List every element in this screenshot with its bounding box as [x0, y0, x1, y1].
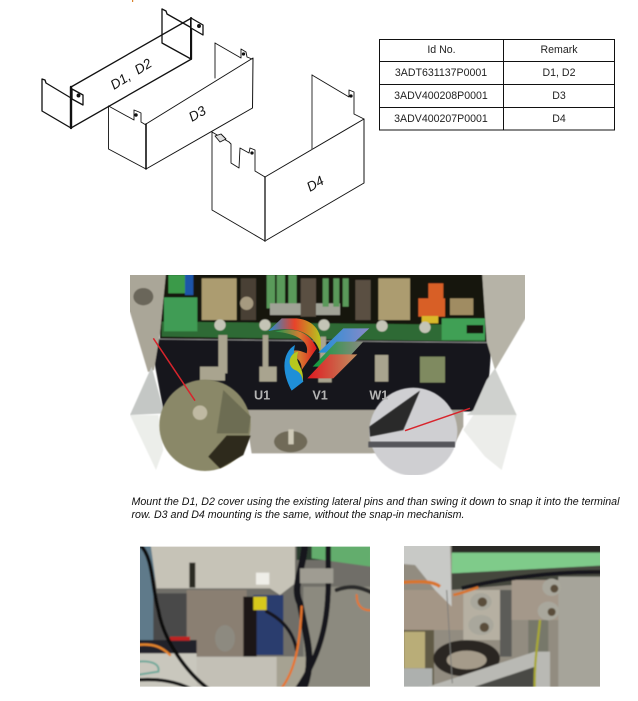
- table text: D1, D2: [543, 67, 576, 79]
- photo: installed cover right view: [404, 546, 600, 687]
- mounting instructions caption: row. D3 and D4 mounting is the same, without the snap-in mechanism.: [132, 509, 464, 521]
- black plate: [150, 338, 492, 412]
- terminal bars: [200, 335, 227, 381]
- mounting instructions caption: Mount the D1, D2 cover using the existing lateral pins and than swing it down to snap it into the terminal: [132, 496, 620, 508]
- metal bracket: [404, 546, 452, 606]
- red pointer arrows: [153, 338, 470, 431]
- lower metal plate: [245, 410, 463, 453]
- parts table: [380, 40, 614, 130]
- cover D1, D2: [42, 9, 203, 128]
- terminal labels: [254, 390, 388, 400]
- table text: Remark: [540, 44, 578, 56]
- label D3: D3: [186, 103, 209, 125]
- circuit board: [159, 275, 488, 342]
- terminal labels: W1: [369, 389, 388, 403]
- metal walls: [130, 275, 167, 372]
- screw heads on board: [214, 319, 431, 333]
- bolts: [468, 579, 561, 635]
- table text: 3ADV400207P0001: [394, 113, 488, 125]
- terminal labels: U1: [254, 389, 270, 403]
- table text: D4: [552, 113, 566, 125]
- table text: Id No.: [427, 44, 456, 56]
- label D1, D2: D1, D2: [108, 55, 155, 93]
- photo: terminal cover mounting with magnified details: [120, 267, 533, 476]
- table text: 3ADT631137P0001: [395, 67, 487, 79]
- top edge orange mark: [132, 0, 133, 2]
- photo: installed cover left view: [140, 546, 370, 687]
- watermark logo: [268, 318, 369, 391]
- magnifier circle left: [159, 380, 251, 471]
- cables: [404, 570, 600, 687]
- cover D3: [108, 43, 253, 169]
- magnifier circle right: [368, 388, 457, 476]
- terminal labels: V1: [312, 389, 328, 403]
- table text: [394, 44, 578, 125]
- mounting instructions caption: [132, 496, 620, 521]
- transparent flanges: [130, 367, 165, 415]
- terminal rail: [430, 650, 551, 687]
- diagram: cover parts D1 D2 D3 D4: [42, 9, 364, 241]
- table text: 3ADV400208P0001: [394, 90, 488, 102]
- table text: D3: [552, 90, 566, 102]
- cables: [137, 543, 373, 690]
- cover D4: [212, 75, 364, 241]
- grey drive housing: [150, 540, 295, 595]
- label D4: D4: [304, 173, 326, 195]
